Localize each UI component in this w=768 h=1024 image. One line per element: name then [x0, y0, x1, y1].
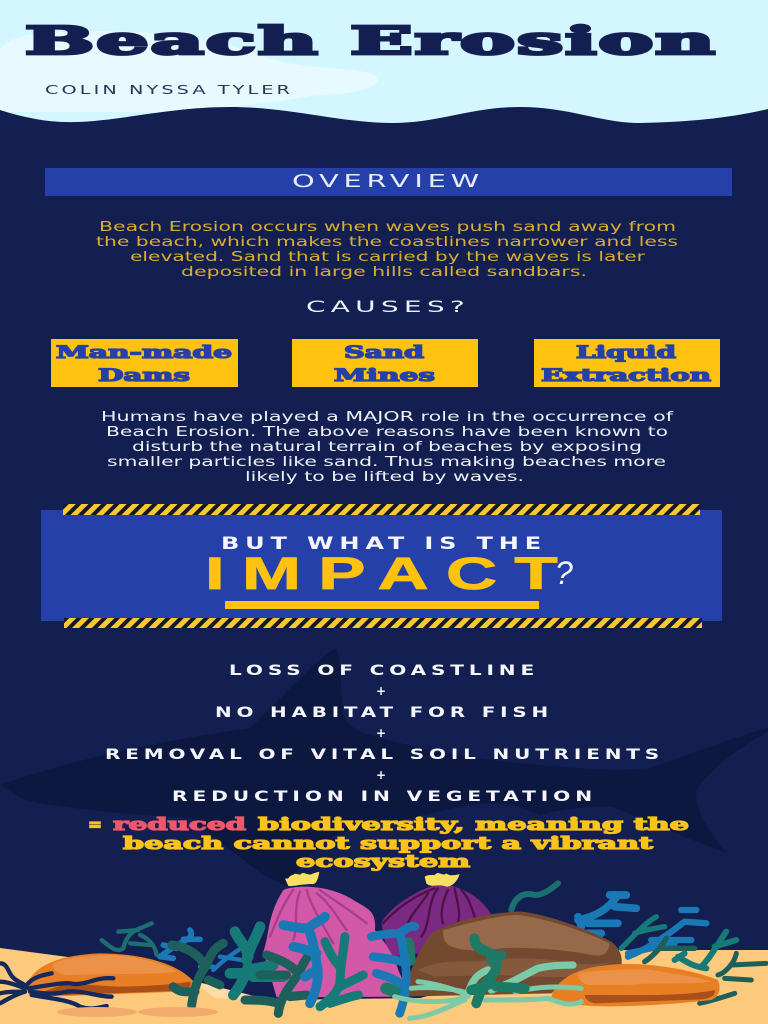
- sand: [0, 948, 768, 1024]
- impact list: +: [376, 768, 386, 782]
- causes paragraph: disturb the natural terrain of beaches by exposing: [132, 440, 642, 455]
- overview paragraph: elevated. Sand that is carried by the waves is later: [130, 250, 646, 265]
- overview band: [45, 168, 732, 196]
- yellow tuft, purple mound: [425, 873, 460, 887]
- underline: [225, 601, 539, 609]
- overview heading: OVERVIEW: [292, 171, 484, 192]
- conclusion text: =: [88, 815, 102, 835]
- impact list: +: [376, 726, 386, 740]
- pink mound: [263, 872, 410, 997]
- impact list: LOSS OF COASTLINE: [229, 663, 539, 679]
- cause: liquid extraction: Liquid: [576, 343, 676, 363]
- cause: man-made dams: [51, 339, 238, 387]
- back corals, right: [511, 883, 766, 1003]
- conclusion text: reduced: [113, 815, 246, 835]
- impact list: REDUCTION IN VEGETATION: [172, 789, 597, 805]
- yellow tuft, pink mound: [285, 872, 319, 886]
- author: COLIN NYSSA TYLER: [45, 82, 293, 97]
- front corals, left: [172, 917, 363, 1013]
- banner line one: BUT WHAT IS THE: [221, 534, 547, 553]
- shark silhouette: [0, 648, 768, 886]
- overview paragraph: the beach, which makes the coastlines narrower and less: [96, 235, 678, 250]
- cause: man-made dams: Dams: [98, 366, 190, 386]
- causes paragraph: smaller particles like sand. Thus making beaches more: [107, 455, 666, 470]
- conclusion text: ecosystem: [296, 852, 470, 872]
- sand shadows: [57, 1007, 137, 1017]
- purple mound: [381, 873, 491, 957]
- cause: liquid extraction: [534, 339, 720, 387]
- right orange shell: [551, 964, 720, 1006]
- cause: sand mines: Sand: [344, 343, 424, 363]
- back corals, left: [102, 923, 243, 970]
- causes paragraph: Humans have played a MAJOR role in the occurrence of: [101, 410, 674, 425]
- conclusion text: beach cannot support a vibrant: [123, 834, 653, 854]
- title: Beach Erosion: [25, 18, 717, 63]
- header sky: [0, 0, 768, 130]
- seabed illustration: [0, 872, 768, 1024]
- cause: sand mines: Mines: [334, 366, 435, 386]
- impact banner: [41, 504, 722, 628]
- banner word: impact: IMPACT: [205, 548, 575, 599]
- impact list: [105, 663, 664, 805]
- icon: cloud: [0, 31, 378, 112]
- left seaweed: [0, 963, 113, 1009]
- cause: liquid extraction: Extraction: [541, 366, 711, 386]
- cause: man-made dams: Man-made: [56, 343, 232, 363]
- front corals, right: [371, 926, 581, 1018]
- overview paragraph: Beach Erosion occurs when waves push sand away from: [99, 220, 676, 235]
- left orange shell: [27, 953, 195, 996]
- causes paragraph: Beach Erosion. The above reasons have been known to: [106, 425, 668, 440]
- causes heading: CAUSES?: [306, 297, 470, 316]
- impact list: NO HABITAT FOR FISH: [215, 705, 553, 721]
- causes paragraph: [101, 410, 674, 485]
- impact list: REMOVAL OF VITAL SOIL NUTRIENTS: [105, 747, 664, 763]
- wave: [0, 107, 768, 140]
- question mark: ?: [555, 555, 573, 591]
- conclusion text: [88, 815, 689, 872]
- brown rock: [401, 912, 622, 997]
- conclusion text: biodiversity, meaning the: [258, 815, 689, 835]
- overview paragraph: [96, 220, 678, 280]
- cause: sand mines: [292, 339, 478, 387]
- impact list: +: [376, 684, 386, 698]
- overview paragraph: deposited in large hills called sandbars.: [181, 265, 587, 280]
- causes paragraph: likely to be lifted by waves.: [245, 470, 524, 485]
